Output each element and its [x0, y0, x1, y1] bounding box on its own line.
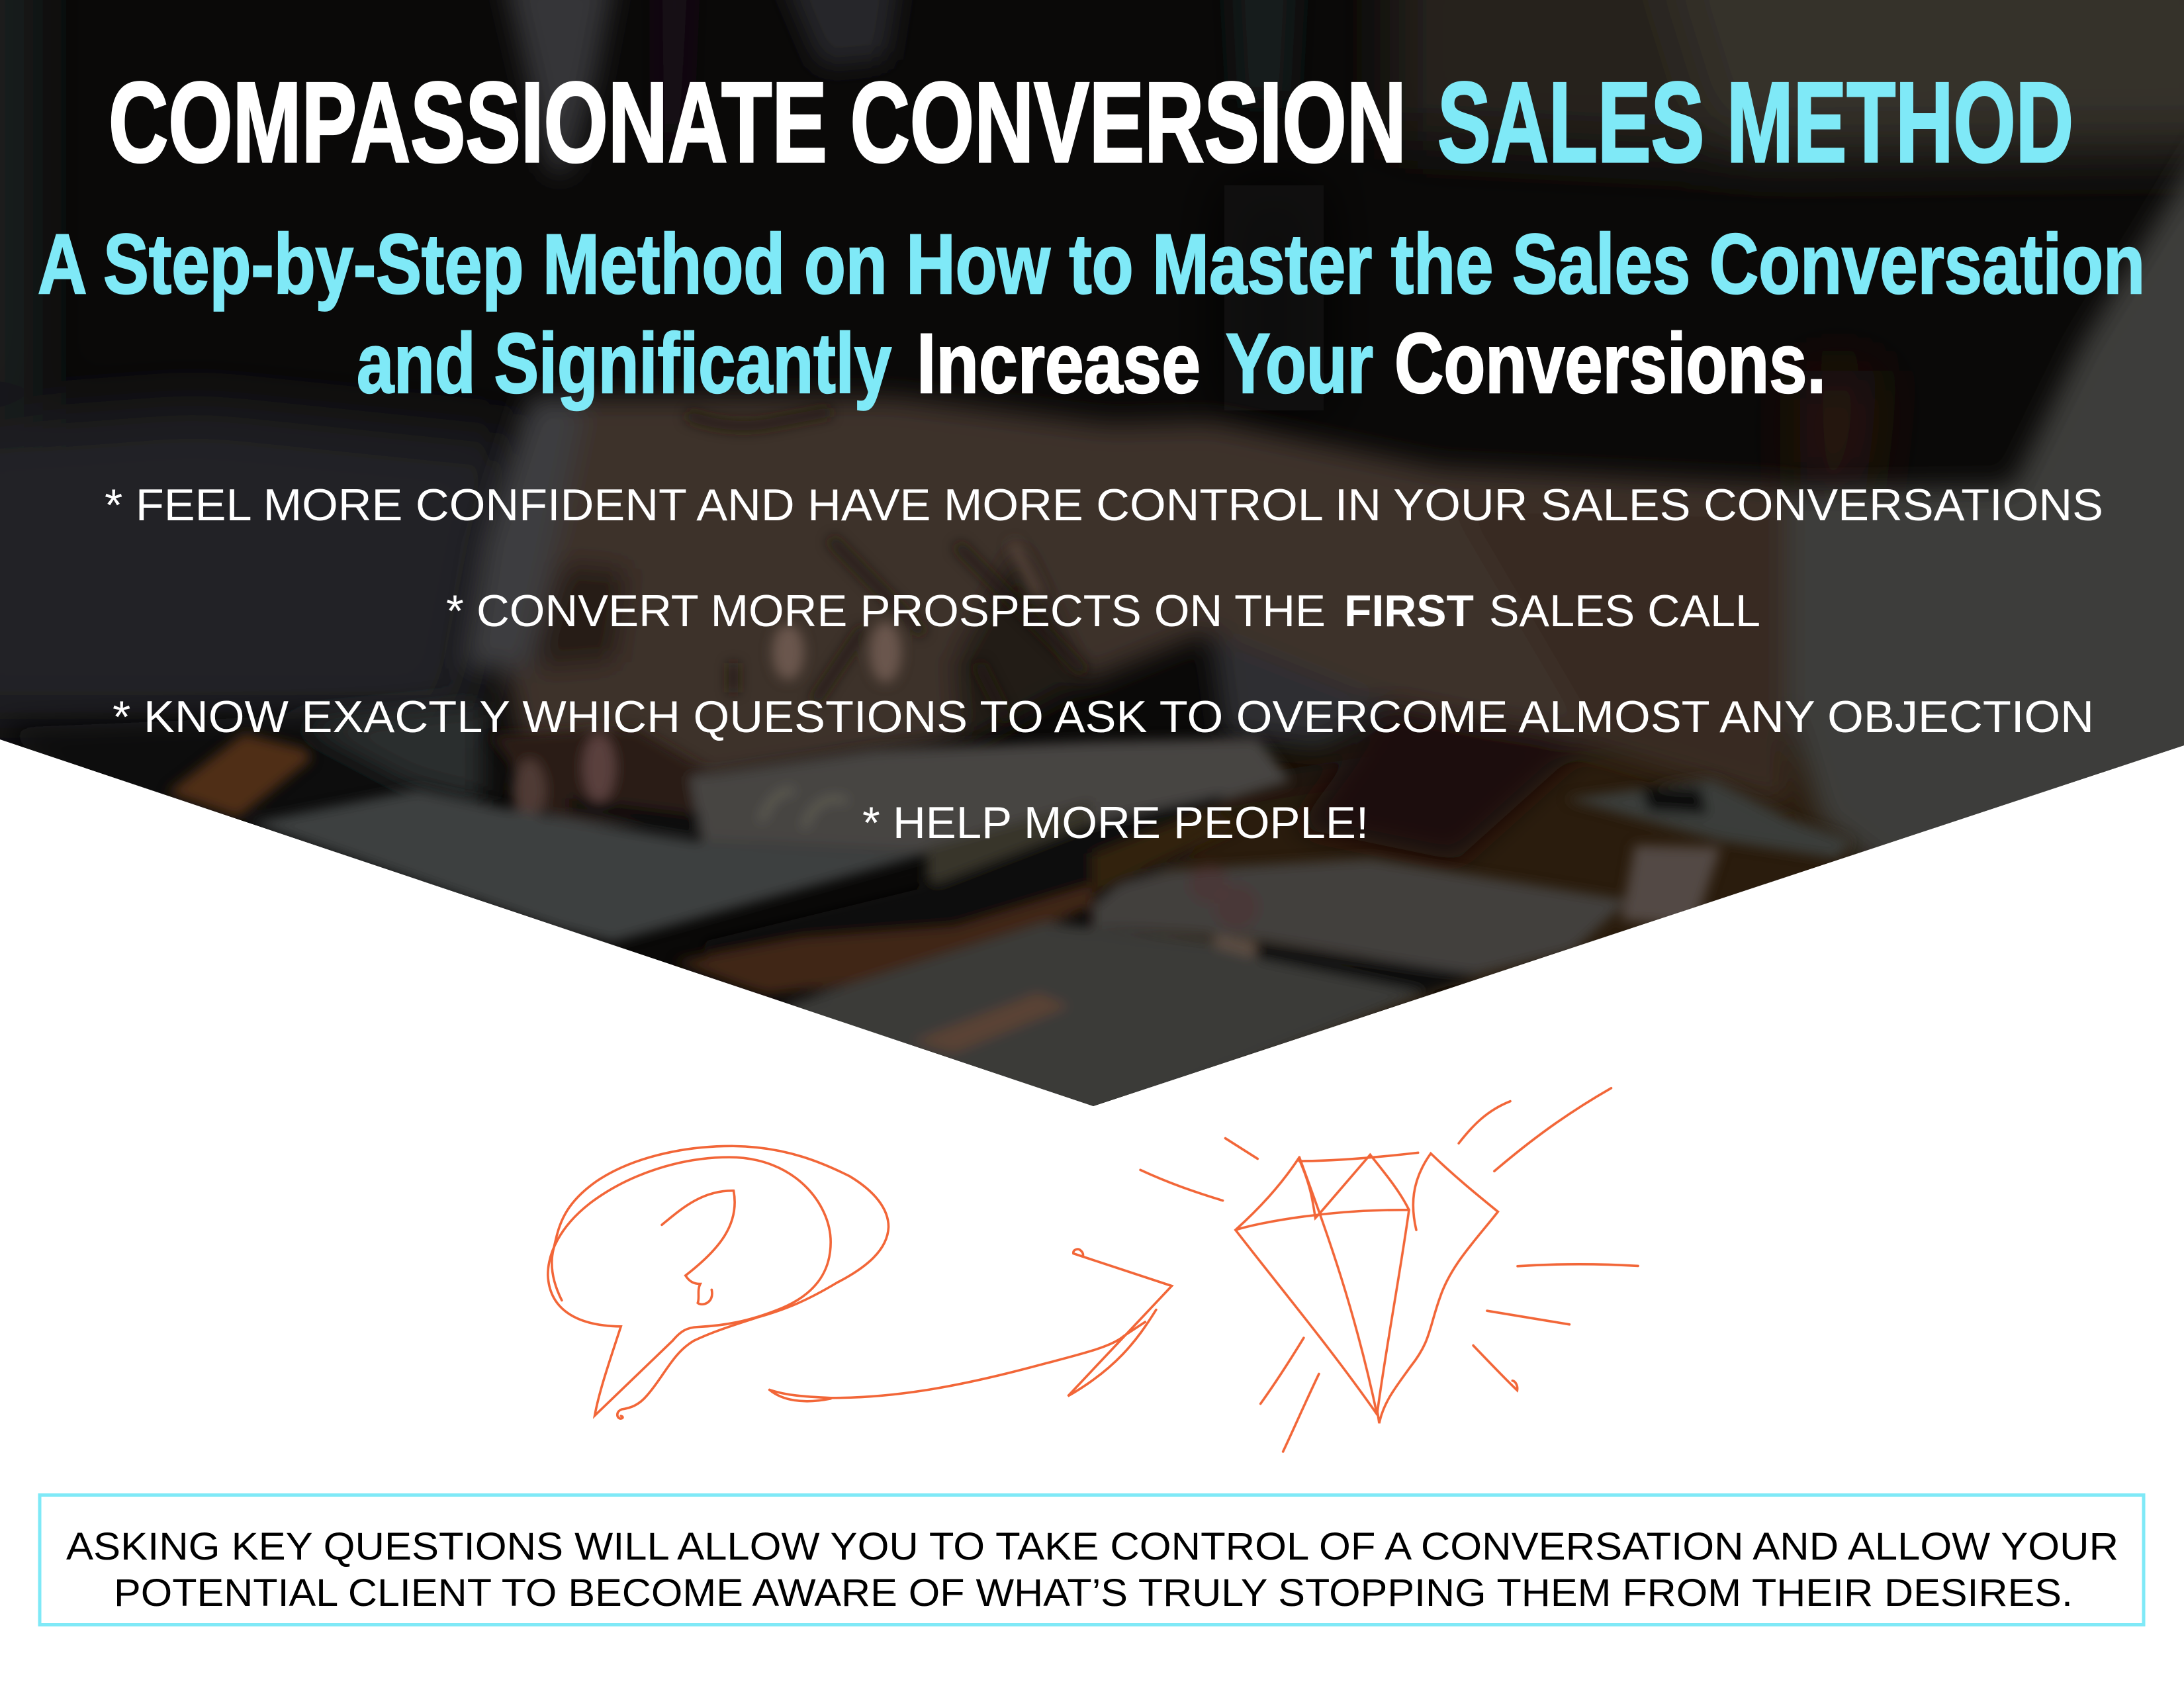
- icon: sparkling diamond: [1140, 1088, 1638, 1452]
- benefit bullet list: SALES CALL: [1489, 586, 1760, 636]
- finger creases: [687, 412, 1084, 722]
- subtitle: Conversions.: [1394, 316, 1826, 411]
- pen on left notebook: [569, 798, 702, 834]
- lower open pages: [781, 922, 1426, 1125]
- subtitle: and Significantly: [357, 316, 891, 411]
- fingers: [490, 728, 715, 827]
- right sleeve: [1787, 132, 2184, 927]
- benefit bullet list: [105, 480, 2103, 848]
- suit details: [503, 0, 615, 172]
- subtitle: [38, 217, 2145, 411]
- benefit bullet list: * HELP MORE PEOPLE!: [862, 798, 1369, 848]
- benefit bullet list: * FEEL MORE CONFIDENT AND HAVE MORE CONTROL IN YOUR SALES CONVERSATIONS: [105, 480, 2103, 530]
- arrow from question to diamond: [770, 1249, 1172, 1401]
- leather bands: [167, 733, 311, 818]
- title: COMPASSIONATE CONVERSION: [109, 59, 1406, 186]
- lower right notebook page: [1092, 859, 1628, 975]
- callout text: [66, 1525, 2118, 1615]
- subtitle: Your: [1226, 316, 1373, 411]
- fingers at the right: [1621, 845, 1721, 927]
- icon: speech bubble with question mark: [548, 1146, 889, 1419]
- background photo: darkened handshake over notebook: [0, 0, 2184, 1125]
- sticky note: [913, 993, 1069, 1053]
- hand to notebook shadow: [1210, 631, 1390, 748]
- callout text: POTENTIAL CLIENT TO BECOME AWARE OF WHAT’S TRULY STOPPING THEM FROM THEIR DESIRES.: [114, 1571, 2073, 1615]
- callout text: ASKING KEY QUESTIONS WILL ALLOW YOU TO TAKE CONTROL OF A CONVERSATION AND ALLOW YOUR: [66, 1525, 2118, 1568]
- callout box: [40, 1495, 2144, 1624]
- notebook pages left: [251, 790, 927, 942]
- hand and forearm: [503, 397, 1787, 821]
- benefit bullet list: FIRST: [1344, 586, 1474, 636]
- red flower sketches: [1189, 864, 1228, 904]
- dark gap under binder: [702, 794, 1224, 993]
- binder rings: [761, 791, 847, 827]
- benefit bullet list: * KNOW EXACTLY WHICH QUESTIONS TO ASK TO OVERCOME ALMOST ANY OBJECTION: [113, 692, 2094, 742]
- left cuff: [463, 397, 585, 669]
- subtitle: Increase: [917, 316, 1201, 411]
- pen: [1255, 942, 1482, 993]
- benefit bullet list: * CONVERT MORE PROSPECTS ON THE: [446, 586, 1326, 636]
- phone on the table: [1566, 779, 1851, 859]
